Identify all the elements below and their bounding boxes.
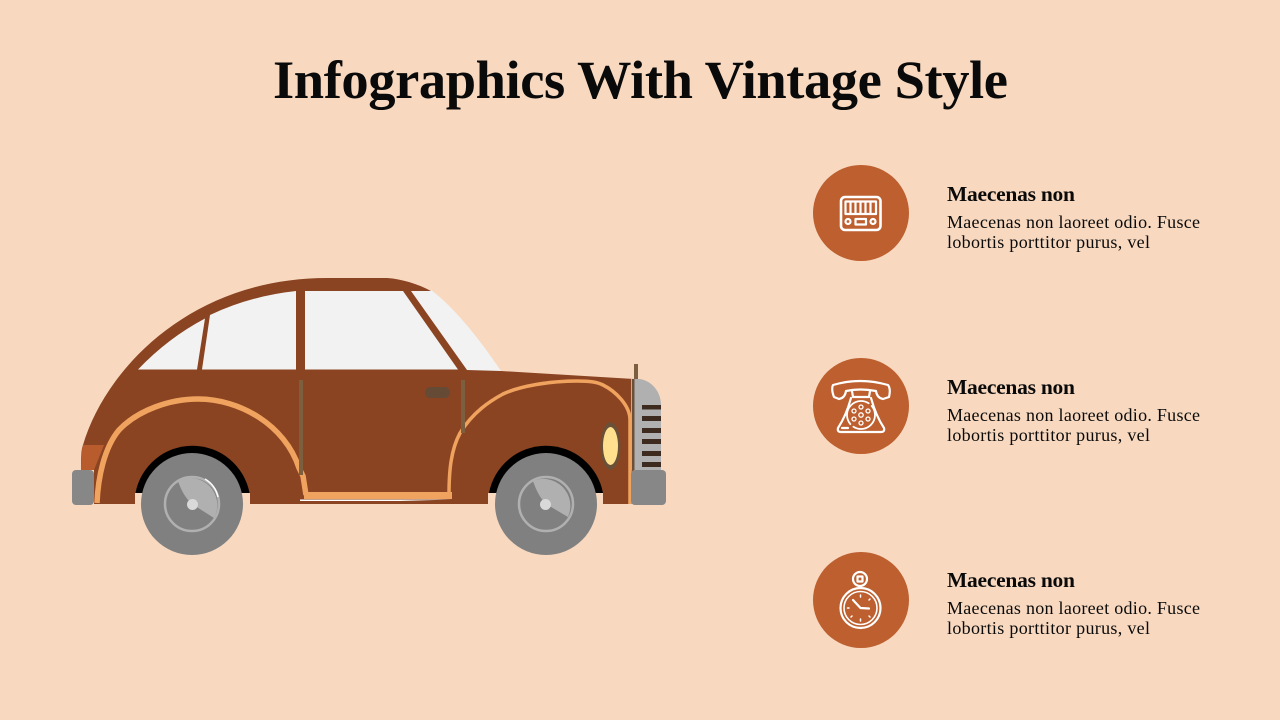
heading: Maecenas non bbox=[947, 568, 1075, 592]
item 3: stopwatch bbox=[813, 552, 1200, 648]
icon: stopwatch bbox=[813, 552, 909, 648]
headlight bbox=[600, 422, 620, 470]
front wheel bbox=[488, 446, 603, 555]
illustration: vintage car bbox=[72, 278, 666, 555]
item 1: radio bbox=[813, 165, 1200, 261]
door seam rear bbox=[299, 380, 303, 475]
rear side window bbox=[138, 318, 205, 370]
description: Maecenas non laoreet odio. Fusce bbox=[947, 405, 1200, 425]
icon: telephone bbox=[813, 358, 909, 454]
windshield bbox=[411, 290, 501, 371]
description: Maecenas non laoreet odio. Fusce bbox=[947, 212, 1200, 232]
grille edge bbox=[632, 379, 634, 470]
title: Infographics With Vintage Style bbox=[273, 49, 1008, 110]
item 2: telephone bbox=[813, 358, 1200, 454]
heading: Maecenas non bbox=[947, 182, 1075, 206]
door handle bbox=[425, 387, 450, 398]
sill highlight bbox=[300, 500, 452, 501]
icon: radio bbox=[813, 165, 909, 261]
rear fender trim bbox=[97, 399, 306, 503]
antenna bbox=[634, 364, 638, 379]
heading: Maecenas non bbox=[947, 375, 1075, 399]
description bbox=[947, 598, 1200, 638]
door seam front bbox=[461, 380, 465, 433]
car body bbox=[81, 278, 634, 504]
description: lobortis porttitor purus, vel bbox=[947, 425, 1150, 445]
description bbox=[947, 212, 1200, 252]
sill strip bbox=[304, 492, 452, 499]
front door window bbox=[305, 291, 458, 370]
rear wheel bbox=[135, 446, 250, 555]
front fender trim bbox=[449, 381, 630, 504]
tail panel bbox=[81, 445, 104, 470]
description: Maecenas non laoreet odio. Fusce bbox=[947, 598, 1200, 618]
grille bbox=[631, 379, 661, 470]
rear door window bbox=[202, 291, 296, 370]
rear bumper bbox=[72, 470, 94, 505]
grille slats bbox=[642, 405, 661, 467]
front bumper bbox=[631, 470, 666, 505]
description: lobortis porttitor purus, vel bbox=[947, 232, 1150, 252]
description bbox=[947, 405, 1200, 445]
description: lobortis porttitor purus, vel bbox=[947, 618, 1150, 638]
